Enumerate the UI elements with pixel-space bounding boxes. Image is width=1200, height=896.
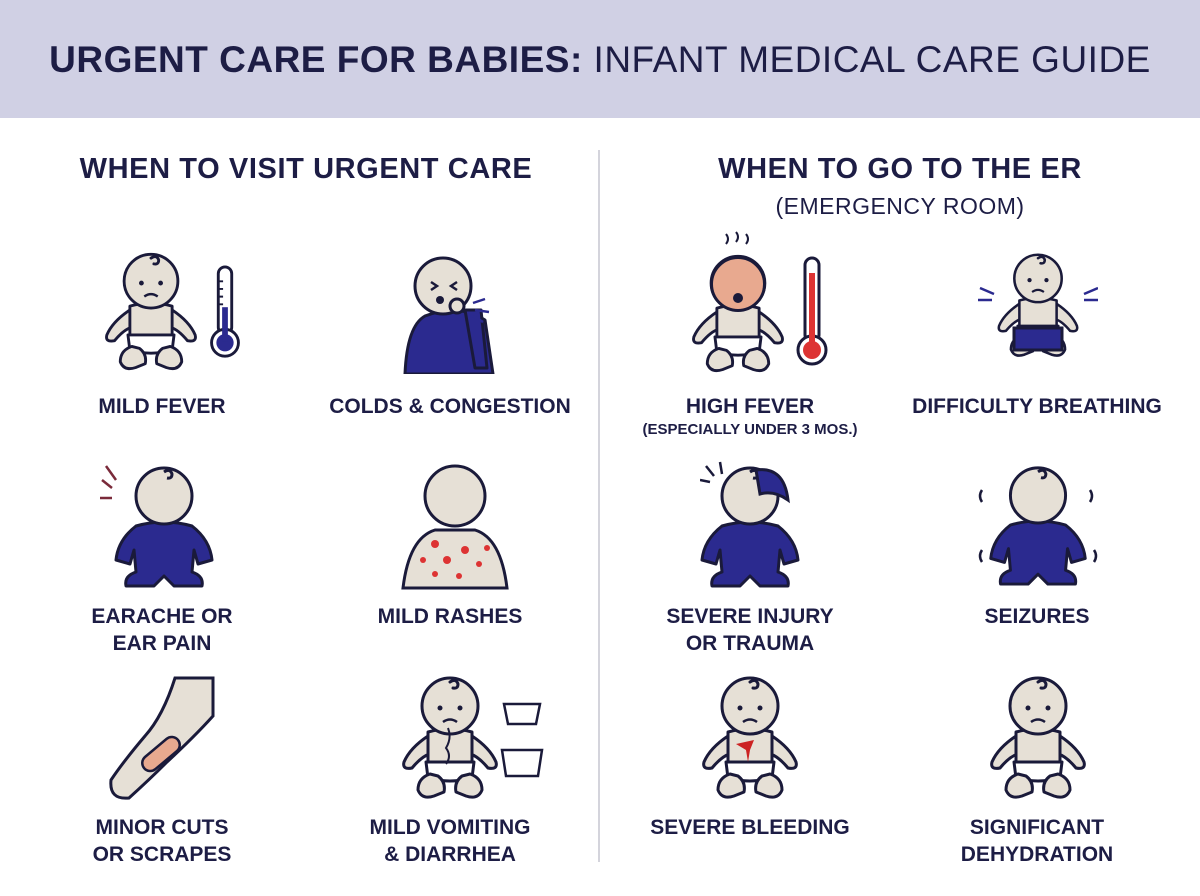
label: vomiting: MILD VOMITING bbox=[370, 816, 530, 839]
icon: mild rashes bbox=[401, 464, 509, 590]
subheading: emergency room: (EMERGENCY ROOM) bbox=[775, 193, 1025, 219]
label: severe injury: OR TRAUMA bbox=[686, 632, 814, 655]
label: high fever: (ESPECIALLY UNDER 3 MOS.) bbox=[642, 421, 858, 438]
icon: severe bleeding bbox=[702, 676, 798, 799]
icon: severe injury bbox=[700, 462, 800, 588]
icon: difficulty breathing bbox=[978, 254, 1098, 357]
label: mild fever: MILD FEVER bbox=[98, 395, 226, 418]
icon: colds bbox=[404, 256, 494, 374]
icon: minor cuts bbox=[109, 676, 214, 800]
label: minor cuts: OR SCRAPES bbox=[93, 843, 231, 866]
icon: vomiting bbox=[402, 676, 544, 799]
icon: seizures bbox=[978, 466, 1098, 586]
label: vomiting bbox=[370, 816, 530, 866]
label: earache: EARACHE OR bbox=[91, 605, 233, 628]
icon: mild fever bbox=[105, 252, 240, 370]
title: URGENT CARE FOR BABIES: INFANT MEDICAL CARE GUIDE bbox=[49, 39, 1151, 80]
label: vomiting: & DIARRHEA bbox=[384, 843, 516, 866]
label: severe injury bbox=[666, 605, 834, 655]
label: mild rashes: MILD RASHES bbox=[378, 605, 522, 628]
label: high fever: HIGH FEVER bbox=[686, 395, 814, 418]
label: severe injury: SEVERE INJURY bbox=[666, 605, 834, 628]
label: minor cuts bbox=[93, 816, 231, 866]
heading: ER: WHEN TO GO TO THE ER bbox=[718, 153, 1082, 185]
label: earache: EAR PAIN bbox=[113, 632, 211, 655]
label: dehydration bbox=[961, 816, 1113, 866]
header band bbox=[0, 0, 1200, 118]
label: severe bleeding: SEVERE BLEEDING bbox=[650, 816, 850, 839]
label: high fever bbox=[642, 395, 858, 438]
label: seizures: SEIZURES bbox=[984, 605, 1090, 628]
icon: earache bbox=[100, 465, 214, 588]
label: minor cuts: MINOR CUTS bbox=[96, 816, 228, 839]
heading: urgent care: WHEN TO VISIT URGENT CARE bbox=[80, 153, 532, 185]
icon: high fever bbox=[692, 231, 828, 372]
label: earache bbox=[91, 605, 233, 655]
label: dehydration: SIGNIFICANT bbox=[970, 816, 1104, 839]
label: colds: COLDS & CONGESTION bbox=[329, 395, 571, 418]
label: difficulty breathing: DIFFICULTY BREATHING bbox=[912, 395, 1162, 418]
label: dehydration: DEHYDRATION bbox=[961, 843, 1113, 866]
icon: dehydration bbox=[990, 676, 1086, 799]
